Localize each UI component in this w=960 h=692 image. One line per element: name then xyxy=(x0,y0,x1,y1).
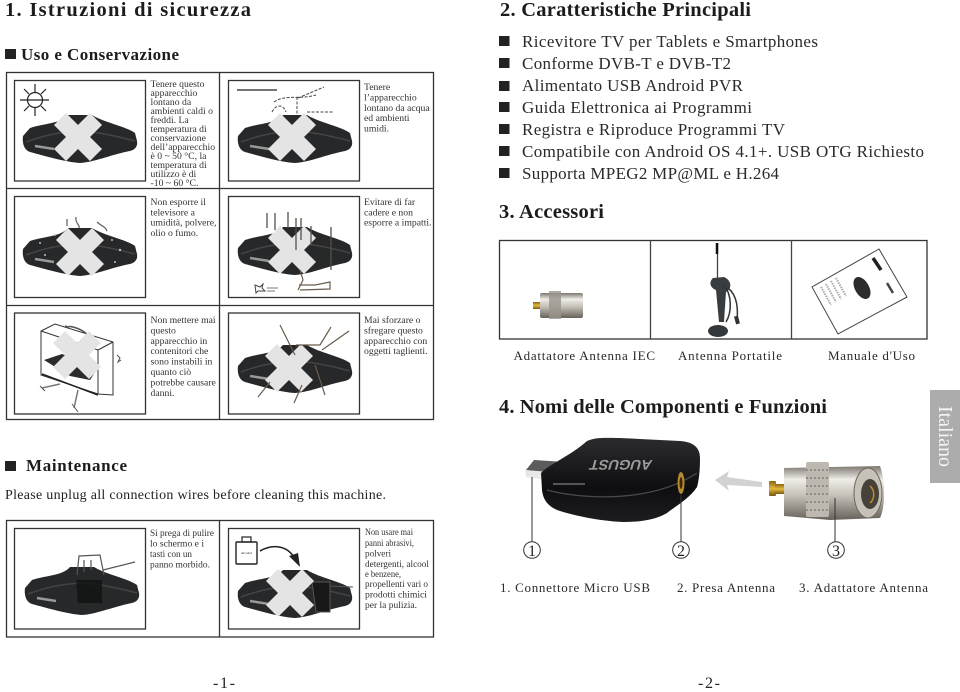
panel: dust warning: Non esporre il xyxy=(150,197,206,208)
panel: temperature warning: lontano da xyxy=(150,97,192,108)
side tab: language: Italiano xyxy=(934,406,956,467)
panel: unstable container warning: sono instabili in xyxy=(150,357,213,368)
text block: cleaning note: Please unplug all connection wires before cleaning this machine. xyxy=(5,488,386,503)
panel: drop warning: Evitare di far xyxy=(364,197,416,208)
panel: temperature warning: utilizzo è di xyxy=(150,169,197,180)
device body xyxy=(541,438,700,522)
side tab: language xyxy=(930,390,960,483)
accessory captions: Adattatore Antenna IEC xyxy=(514,348,655,363)
accessory captions: Antenna Portatile xyxy=(678,348,782,363)
panel: water warning: ed ambienti xyxy=(364,113,410,124)
panel: water warning: Tenere xyxy=(364,82,390,93)
panel: drop warning xyxy=(228,196,432,298)
component labels xyxy=(500,580,928,595)
icon: user manual xyxy=(812,249,907,334)
panel: water warning: l’apparecchio xyxy=(364,92,417,104)
panel: temperature warning: conservazione xyxy=(150,133,206,144)
heading: maintenance: Maintenance xyxy=(26,456,127,475)
panel: temperature warning: apparecchio xyxy=(150,88,197,99)
arrow: insert direction xyxy=(715,471,762,491)
panel: water warning: lontano da acqua xyxy=(364,103,430,114)
antenna socket xyxy=(678,472,684,494)
panel: soft cloth: panno morbido. xyxy=(150,560,210,570)
panel: temperature warning: ambienti caldi o xyxy=(150,106,213,117)
panel: no chemicals xyxy=(228,527,429,629)
callout 3 xyxy=(828,498,844,560)
panel: temperature warning: temperatura di xyxy=(150,160,207,171)
antenna adapter xyxy=(769,481,776,496)
panel: no chemicals: Non usare mai xyxy=(365,527,413,538)
panel: no chemicals: panni abrasivi, xyxy=(365,538,414,549)
list: main features: Compatibile con Android OS 4.1+. USB OTG Richiesto xyxy=(522,142,924,161)
panel: sharp objects warning: sfregare questo xyxy=(364,325,423,336)
panel: water warning: umidi. xyxy=(364,124,389,134)
icon: IEC adapter xyxy=(533,291,583,319)
panel: temperature warning: Tenere questo xyxy=(150,79,205,90)
micro USB connector xyxy=(526,460,565,474)
callout 2: 2 xyxy=(677,543,685,560)
panel: no chemicals: propellenti vari o xyxy=(365,579,428,590)
panel: drop warning: cadere e non xyxy=(364,208,413,218)
panel: dust warning xyxy=(14,196,216,298)
panel: no chemicals: per la pulizia. xyxy=(365,600,417,611)
list: main features: Ricevitore TV per Tablets e Smartphones xyxy=(522,32,818,51)
icon: alcohol bottle xyxy=(236,537,257,564)
callout 3: 3 xyxy=(832,543,840,560)
heading: storage: Uso e Conservazione xyxy=(21,45,179,64)
icon: sun xyxy=(20,84,49,116)
panel: water warning xyxy=(228,80,430,181)
component labels: 3. Adattatore Antenna xyxy=(799,580,928,595)
panel: no chemicals: detergenti, alcool xyxy=(365,559,429,570)
panel: unstable container warning: danni. xyxy=(150,388,174,399)
panel: unstable container warning: quanto ciò xyxy=(150,367,191,378)
list: main features: Guida Elettronica ai Programmi xyxy=(522,98,752,117)
list: main features xyxy=(499,32,924,183)
panel: accessories table xyxy=(500,240,927,339)
list: main features: Supporta MPEG2 MP@ML e H.264 xyxy=(522,164,780,183)
device logo: AUGUST xyxy=(588,456,654,472)
page number left: -1- xyxy=(213,675,235,692)
callout 2 xyxy=(673,495,689,560)
panel: soft cloth: lo schermo e i xyxy=(150,538,204,550)
title: section 3: 3. Accessori xyxy=(499,201,604,223)
accessory captions xyxy=(514,348,915,363)
panel: sharp objects warning xyxy=(228,313,428,414)
panel: unstable container warning: apparecchio in xyxy=(150,336,207,347)
title: section 4: 4. Nomi delle Componenti e Funzioni xyxy=(499,396,827,418)
panel: soft cloth: tasti con un xyxy=(150,549,192,560)
icon: portable antenna xyxy=(708,243,740,337)
panel: temperature warning: -10 ~ 60 °C. xyxy=(150,178,198,189)
callout 1: 1 xyxy=(528,543,536,560)
panel: no chemicals: prodotti chimici xyxy=(365,590,427,600)
panel: sharp objects warning: apparecchio con xyxy=(364,336,427,347)
panel: unstable container warning: contenitori che xyxy=(150,346,208,357)
panel: soft cloth: Si prega di pulire xyxy=(150,528,214,539)
panel: temperature warning xyxy=(14,79,215,189)
panel: sharp objects warning: Mai sforzare o xyxy=(364,315,421,326)
list: main features: Alimentato USB Android PVR xyxy=(522,76,744,95)
panel: unstable container warning: potrebbe causare xyxy=(150,377,216,388)
panel: sharp objects warning: oggetti taglienti. xyxy=(364,346,428,357)
panel: soft cloth xyxy=(14,528,214,629)
panel: no chemicals: e benzene, xyxy=(365,569,401,580)
callout 1 xyxy=(524,477,540,560)
panel: cleaning table xyxy=(6,520,434,637)
diagram: device and adapter xyxy=(525,438,884,522)
panel: temperature warning: freddi. La xyxy=(150,115,189,126)
panel: temperature warning: temperatura di xyxy=(150,124,207,135)
icon: alcohol bottle: Alcohol xyxy=(241,551,252,555)
panel: dust warning: olio o fumo. xyxy=(150,228,198,239)
panel: dust warning: televisore a xyxy=(150,208,196,218)
component labels: 1. Connettore Micro USB xyxy=(500,580,650,595)
arrow: pour xyxy=(260,547,300,567)
panel: no chemicals: polveri xyxy=(365,548,391,560)
accessory captions: Manuale d'Uso xyxy=(828,348,915,363)
panel: unstable container warning xyxy=(14,313,216,414)
panel: safety table xyxy=(6,72,434,420)
page number right: -2- xyxy=(698,675,720,692)
panel: unstable container warning: Non mettere mai xyxy=(150,315,216,326)
list: main features: Conforme DVB-T e DVB-T2 xyxy=(522,54,731,73)
panel: drop warning: esporre a impatti. xyxy=(364,218,432,228)
panel: unstable container warning: questo xyxy=(150,325,176,336)
component labels: 2. Presa Antenna xyxy=(677,580,775,595)
panel: temperature warning: dell’apparecchio xyxy=(150,142,215,153)
panel: dust warning: umidità, polvere, xyxy=(150,218,216,228)
panel: temperature warning: è 0 ~ 50 °C, la xyxy=(150,151,207,162)
list: main features: Registra e Riproduce Programmi TV xyxy=(522,120,786,139)
